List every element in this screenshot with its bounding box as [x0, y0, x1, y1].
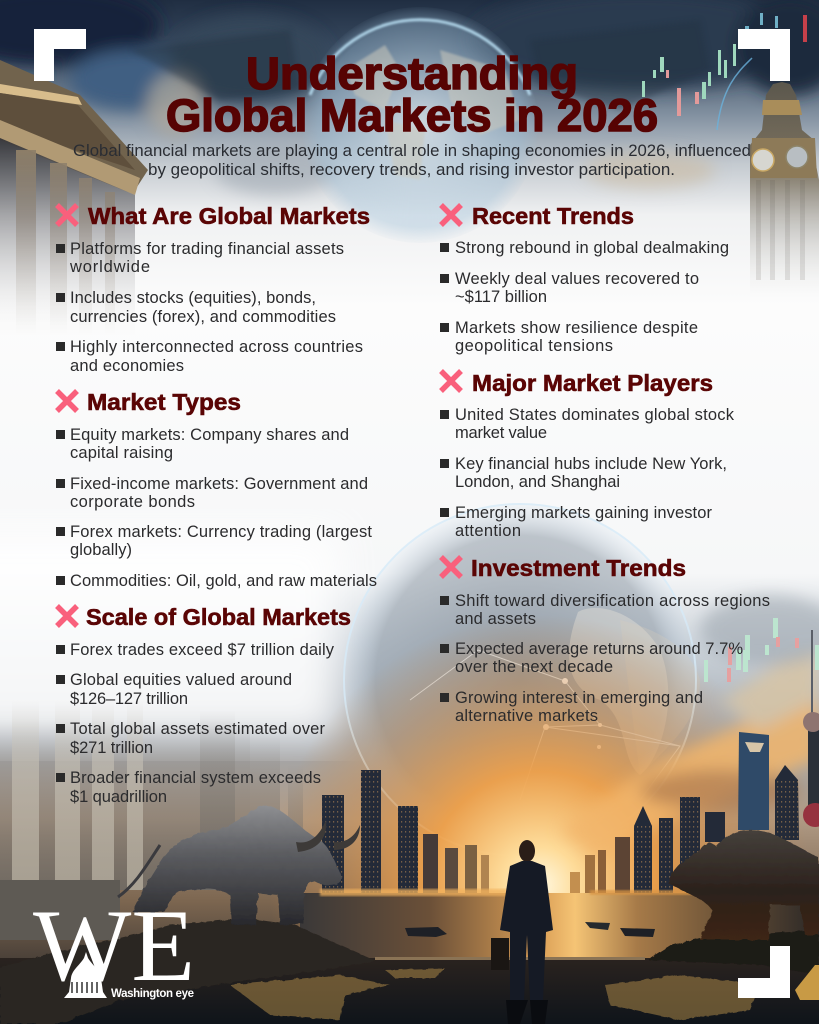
- stock exchange building: [0, 60, 148, 335]
- river and lights: [300, 889, 819, 961]
- lower globe: [344, 504, 700, 856]
- bullet list: Includes stocks (equities), bonds,: [70, 289, 316, 307]
- bullet list: [440, 239, 729, 355]
- candlesticks lower right: [704, 618, 819, 682]
- reflective floor with gold map: [0, 957, 819, 1024]
- bullet list: attention: [455, 522, 521, 540]
- panel: investment trends: [440, 555, 770, 725]
- bullet list: Weekly deal values recovered to: [455, 270, 699, 288]
- heading: Recent Trends: [472, 203, 634, 229]
- rock under bear: [648, 930, 819, 975]
- bullet list: Global equities valued around: [70, 671, 292, 689]
- world map silhouettes at top: [130, 20, 710, 110]
- bullet list: corporate bonds: [70, 493, 195, 511]
- icon: pink cross: [441, 371, 461, 391]
- title: Understanding: [246, 48, 578, 99]
- bullet list: Markets show resilience despite: [455, 319, 698, 337]
- bullet list: $126–127 trillion: [70, 690, 188, 708]
- bullet list: geopolitical tensions: [455, 337, 613, 355]
- bull: [118, 805, 360, 925]
- ghost city: [200, 710, 303, 890]
- logo: Washington eye: WE: [33, 889, 195, 1003]
- bullet list: Equity markets: Company shares and: [70, 426, 349, 444]
- lit windows: [322, 770, 799, 906]
- bullet list: Growing interest in emerging and: [455, 689, 703, 707]
- gold bar: [795, 965, 819, 1000]
- bullet list: currencies (forex), and commodities: [70, 308, 336, 326]
- heading: Major Market Players: [472, 370, 713, 396]
- candlesticks top right: [642, 13, 807, 130]
- bullet list: $271 trillion: [70, 739, 153, 757]
- icon: capitol dome: [64, 952, 107, 998]
- bullet list: over the next decade: [455, 658, 613, 676]
- Big Ben tower: [750, 82, 819, 300]
- icon: pink cross: [441, 205, 461, 225]
- panel: recent trends: [440, 203, 729, 355]
- panel: scale of global markets: [56, 604, 351, 806]
- bullet list: and economies: [70, 357, 184, 375]
- top storm clouds: [0, 0, 819, 195]
- logo: Washington eye: Washington eye: [111, 988, 194, 1000]
- bullet list: and assets: [455, 610, 536, 628]
- bullet list: globally): [70, 541, 132, 559]
- bullet list: Shift toward diversification across regions: [455, 592, 770, 610]
- bullet list: Strong rebound in global dealmaking: [455, 239, 729, 257]
- heading: Scale of Global Markets: [86, 604, 351, 630]
- bullet list: Total global assets estimated over: [70, 720, 326, 738]
- icon: pink cross: [441, 557, 461, 577]
- top globe: [302, 7, 538, 243]
- bullet list: Expected average returns around 7.7%: [455, 640, 743, 658]
- bullet list: Key financial hubs include New York,: [455, 455, 727, 473]
- bullet list: United States dominates global stock: [455, 406, 735, 424]
- bullet list: Commodities: Oil, gold, and raw materials: [70, 572, 377, 590]
- intro paragraph: by geopolitical shifts, recovery trends, and rising investor participation.: [148, 160, 675, 179]
- sunset clouds: [200, 595, 819, 950]
- bear: [668, 830, 819, 940]
- bullet list: Emerging markets gaining investor: [455, 504, 712, 522]
- icon: pink cross: [57, 205, 77, 225]
- panel: what are global markets: [56, 203, 370, 375]
- bullet list: market value: [455, 424, 547, 442]
- bullet list: [440, 406, 735, 540]
- title: [166, 48, 658, 141]
- bullet list: London, and Shanghai: [455, 473, 620, 491]
- bullet list: $1 quadrillion: [70, 788, 167, 806]
- heading: What Are Global Markets: [88, 203, 370, 229]
- bullet list: Forex trades exceed $7 trillion daily: [70, 641, 335, 659]
- corner bracket top right: [738, 29, 790, 81]
- bullet list: alternative markets: [455, 707, 598, 725]
- icon: pink cross: [57, 391, 77, 411]
- businessman with briefcase: [491, 840, 553, 1024]
- bullet list: Highly interconnected across countries: [70, 338, 363, 356]
- panel: major market players: [440, 370, 735, 540]
- bullet list: worldwide: [69, 258, 150, 276]
- bullet list: Forex markets: Currency trading (largest: [70, 523, 372, 541]
- white fade over left lower text: [0, 530, 340, 740]
- skyline: [322, 630, 819, 906]
- corner bracket top left: [34, 29, 86, 81]
- icon: pink cross: [57, 606, 77, 626]
- bullet list: [440, 592, 770, 725]
- intro paragraph: Global financial markets are playing a central role in shaping economies in 2026, influenced: [73, 141, 751, 160]
- ghost columns on lower left: [0, 700, 250, 940]
- bullet list: Platforms for trading financial assets: [70, 240, 344, 258]
- bullet list: [56, 426, 377, 590]
- bullet list: ~$117 billion: [455, 288, 547, 306]
- bullet list: capital raising: [70, 444, 173, 462]
- bullet list: [56, 641, 335, 806]
- title: Global Markets in 2026: [166, 90, 658, 141]
- bullet list: [56, 240, 363, 375]
- panel: market types: [56, 389, 377, 590]
- intro paragraph: [73, 141, 751, 179]
- heading: Market Types: [87, 389, 241, 415]
- bullet list: Fixed-income markets: Government and: [70, 475, 368, 493]
- rock under bull: [0, 918, 376, 1024]
- bullet list: Broader financial system exceeds: [70, 769, 321, 787]
- corner bracket bottom right: [738, 946, 790, 998]
- heading: Investment Trends: [471, 555, 686, 581]
